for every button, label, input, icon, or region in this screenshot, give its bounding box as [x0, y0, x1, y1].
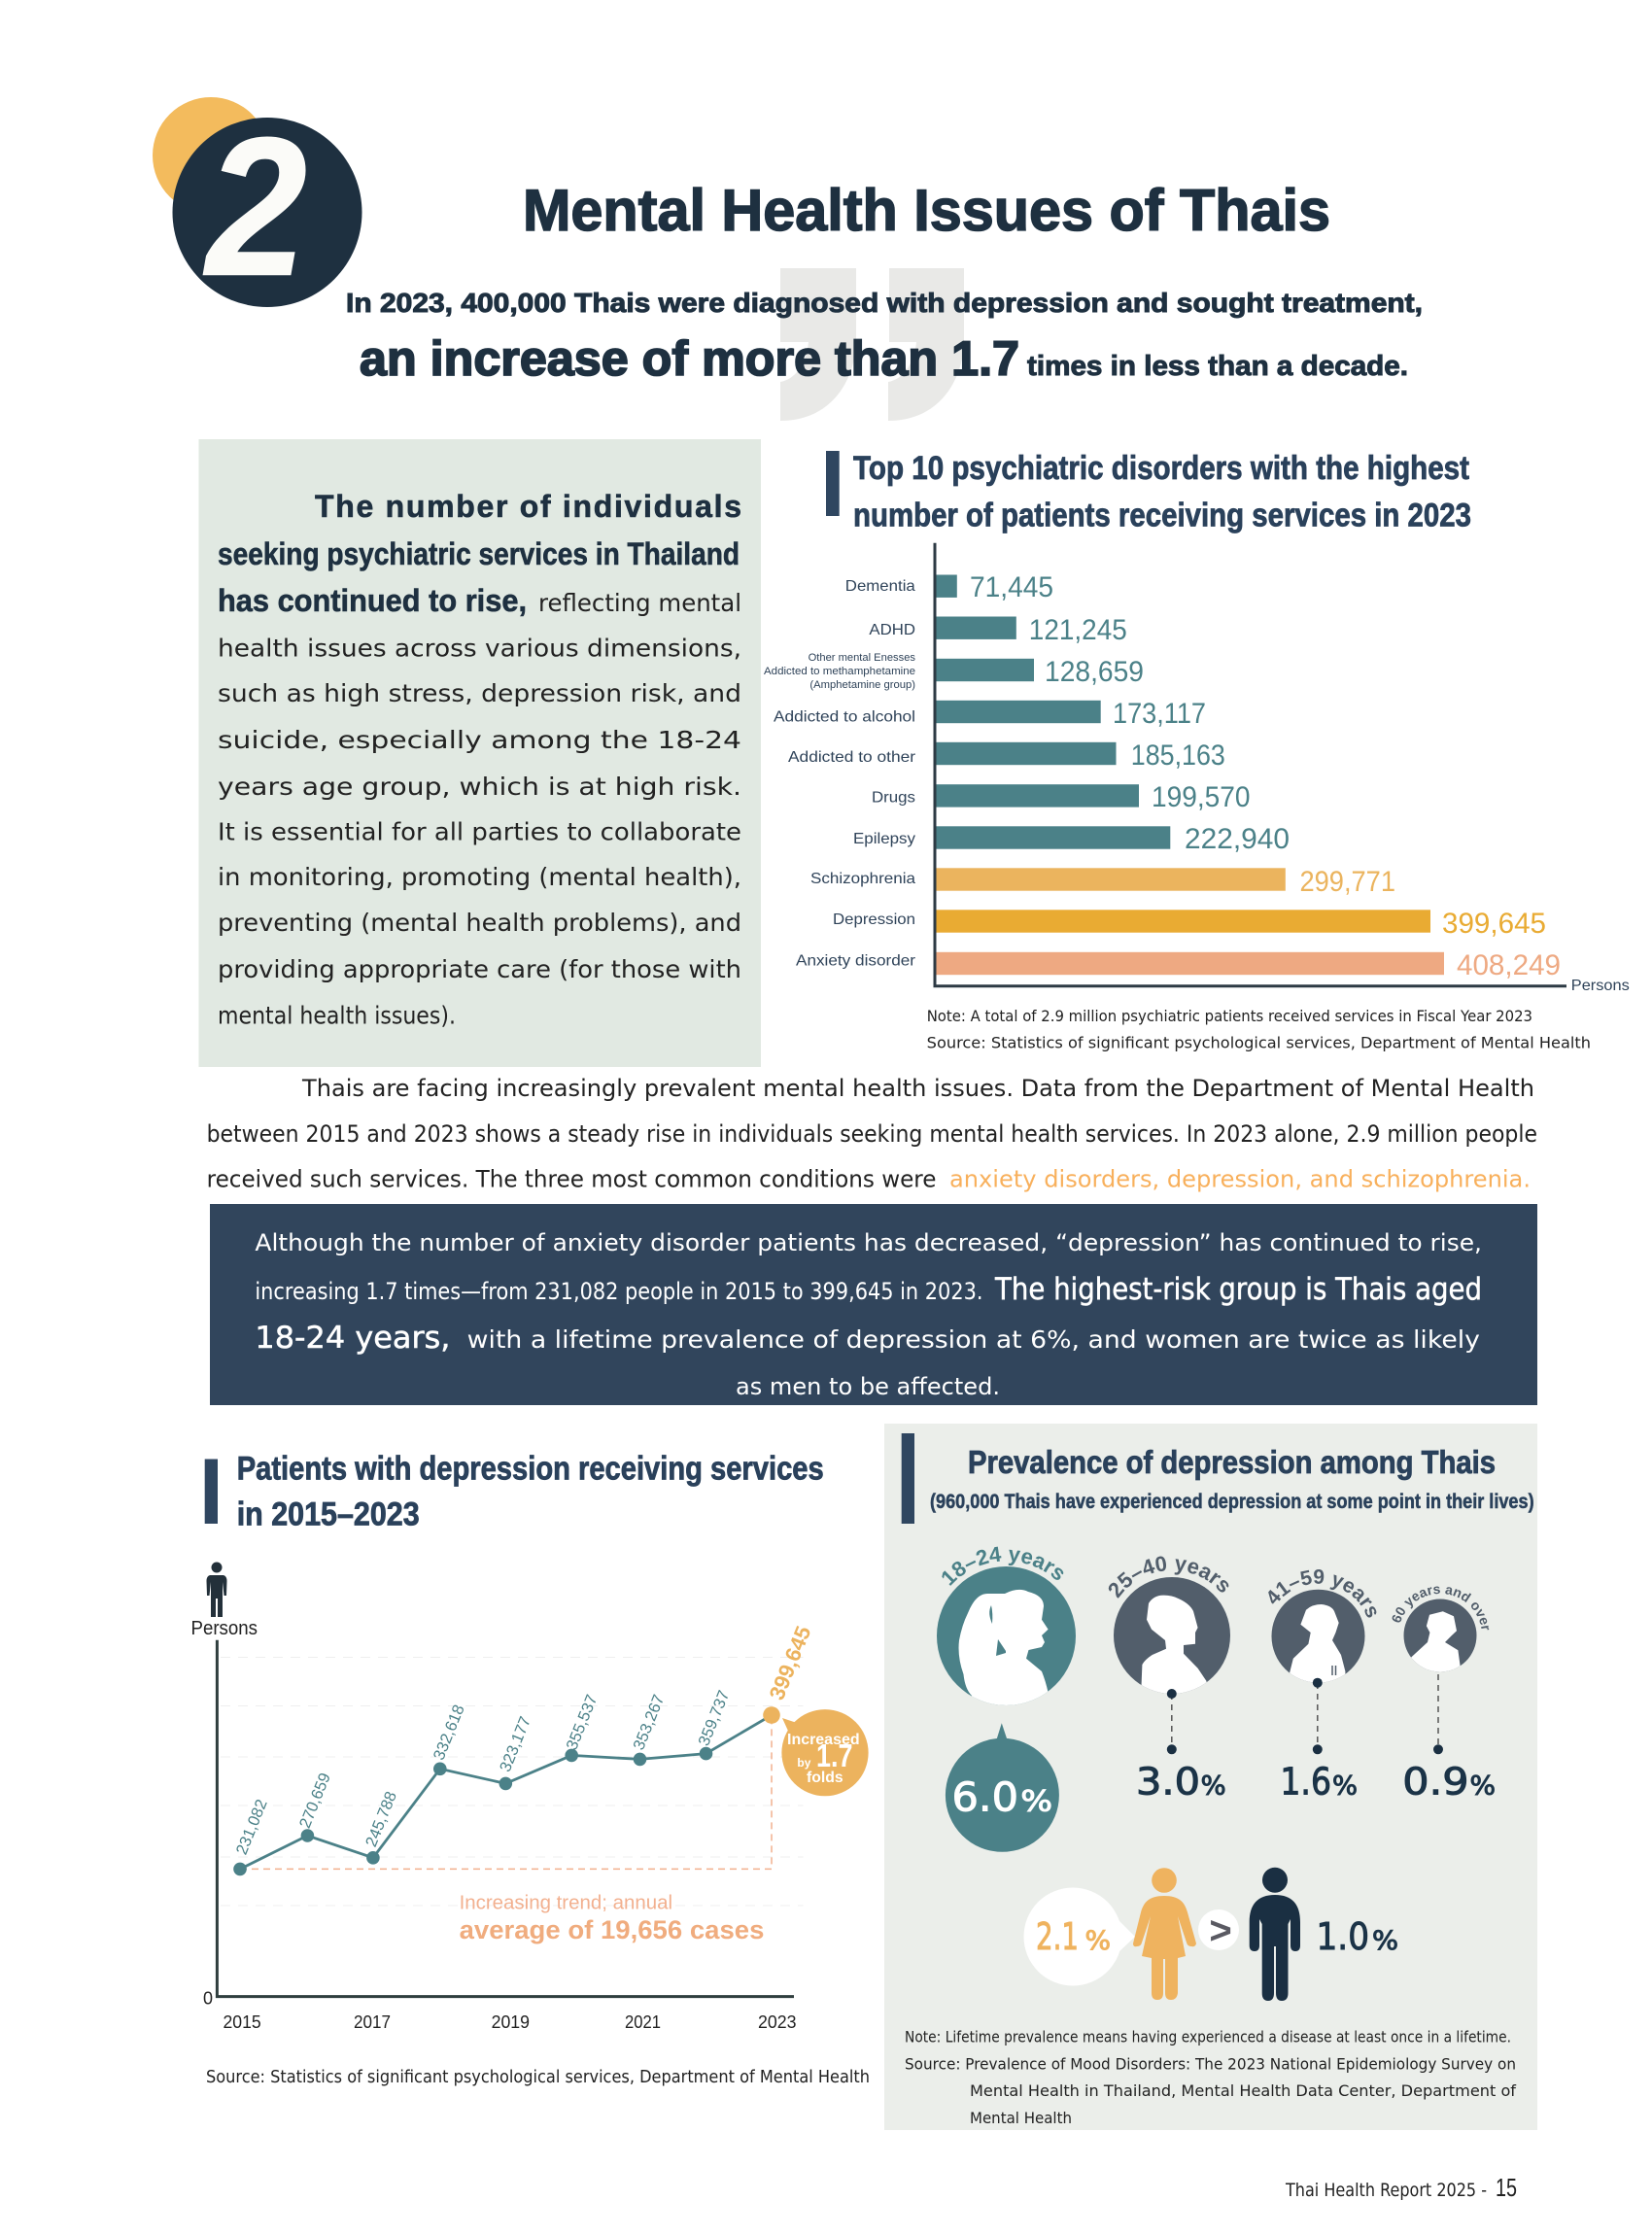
footer: page number: Thai Health Report 2025 - [1285, 2180, 1487, 2201]
bar chart: top 10 disorders: Depression [833, 911, 915, 928]
value: 3.0%: 3.0 [1136, 1761, 1200, 1804]
line chart: patients with depression: 2015 [224, 2012, 261, 2032]
footer: page number: 15 [1496, 2173, 1517, 2202]
prevalence note and source: Mental Health [970, 2109, 1072, 2127]
panel: depression callout: with a lifetime prevalence of depression at 6%, and women are twice as likely [467, 1325, 1480, 1354]
age group: 60 years and over [1392, 1586, 1489, 1671]
bar chart: top 10 disorders: 185,163 [1131, 739, 1225, 772]
line chart: patients with depression: 332,618 [430, 1702, 468, 1763]
decorative quote mark [780, 268, 964, 421]
headline statement: times in less than a decade. [1027, 351, 1408, 382]
age group: 25-40 years: 25–40 years [1108, 1557, 1228, 1599]
panel: introduction: providing appropriate care (for those with [218, 955, 741, 983]
bar chart: top 10 disorders: Dementia [845, 578, 915, 595]
line chart: patients with depression: 2019 [492, 2012, 530, 2032]
callout: increased by 1.7 folds: by [797, 1756, 811, 1770]
panel: introduction: preventing (mental health problems), and [218, 909, 741, 937]
age group: 60 years and over: 60 years and over [1392, 1586, 1489, 1631]
comparison sign: > [1209, 1909, 1232, 1952]
bar chart note and source [927, 1007, 1591, 1052]
age group: 41-59 years [1268, 1569, 1376, 1683]
bar chart: top 10 disorders: Anxiety disorder [796, 952, 916, 969]
line chart: patients with depression [190, 1563, 869, 2032]
trend annotation: Increasing trend; annual [460, 1893, 672, 1914]
prevalence note and source: Note: Lifetime prevalence means having experienced a disease at least once in a lifetime. [905, 2028, 1511, 2046]
panel: introduction: has continued to rise, [218, 583, 527, 618]
bar chart: top 10 disorders: 399,645 [1442, 908, 1546, 940]
icon: man [1250, 1868, 1300, 2001]
heading: top 10 disorders: number of patients receiving services in 2023 [853, 498, 1471, 534]
line chart: patients with depression: 2023 [758, 2012, 797, 2032]
value: 1.6%: 1.6 [1280, 1761, 1331, 1804]
value bubble: 6.0%: % [1020, 1784, 1052, 1817]
value: 3.0% [1136, 1761, 1226, 1804]
title: Mental Health Issues of Thais [523, 178, 1330, 243]
line chart: patients with depression: 323,177 [497, 1714, 534, 1774]
age group: 41-59 years: 41–59 years [1268, 1569, 1376, 1617]
section number badge: 2 [202, 97, 307, 318]
heading: top 10 disorders [826, 450, 1471, 534]
value bubble: 6.0%: 6.0 [952, 1773, 1018, 1820]
men value: 1.0%: % [1372, 1926, 1398, 1956]
value: 0.9%: 0.9 [1402, 1761, 1469, 1804]
women value bubble: 2.1% [1024, 1887, 1135, 1986]
paragraph: overview: between 2015 and 2023 shows a steady rise in individuals seeking mental health services. In 2023 alone, 2.9 million people [207, 1120, 1537, 1148]
bar chart note and source: Note: A total of 2.9 million psychiatric patients received services in Fiscal Year 2023 [927, 1007, 1532, 1025]
value: 0.9%: % [1469, 1771, 1496, 1802]
bar chart note and source: Source: Statistics of significant psychological services, Department of Mental Health [927, 1034, 1591, 1052]
panel: depression callout: Although the number of anxiety disorder patients has decreased, “depression” has continued to rise, [255, 1229, 1482, 1256]
panel: introduction: reflecting mental [538, 589, 741, 617]
heading: depression trend [205, 1450, 824, 1532]
headline statement: In 2023, 400,000 Thais were diagnosed with depression and sought treatment, [346, 288, 1423, 318]
bar chart: top 10 disorders: 299,771 [1300, 866, 1395, 898]
panel: introduction: in monitoring, promoting (mental health), [218, 863, 741, 891]
bar chart: top 10 disorders: Persons [1571, 978, 1630, 994]
comparison sign [1198, 1909, 1239, 1952]
line chart: patients with depression: 353,267 [630, 1692, 668, 1752]
bar chart: top 10 disorders: Other mental Enesses [809, 652, 915, 664]
heading: depression trend: in 2015–2023 [237, 1496, 420, 1532]
panel: introduction: health issues across various dimensions, [218, 634, 741, 663]
panel: introduction: seeking psychiatric services in Thailand [218, 536, 740, 571]
icon: woman [1133, 1868, 1196, 2000]
panel: depression callout: 18-24 years, [255, 1321, 450, 1356]
women value bubble: 2.1%: 2.1 [1036, 1915, 1079, 1958]
callout: increased by 1.7 folds [781, 1709, 869, 1796]
line chart: patients with depression: 355,537 [564, 1692, 602, 1752]
headline statement: an increase of more than 1.7 [360, 331, 1019, 386]
age group: 18-24 years [937, 1547, 1076, 1705]
callout: increased by 1.7 folds: Increased [787, 1732, 860, 1748]
heading: depression trend: Patients with depression receiving services [237, 1450, 824, 1487]
line chart: patients with depression: 2021 [625, 2012, 661, 2032]
prevalence note and source: Mental Health in Thailand, Mental Health Data Center, Department of [970, 2081, 1516, 2100]
bar chart: top 10 disorders: Drugs [872, 790, 915, 807]
connectors: age groups to values [1167, 1674, 1443, 1754]
line chart: patients with depression: Persons [190, 1618, 258, 1639]
bar chart: top 10 disorders: ADHD [869, 622, 915, 638]
bar chart: top 10 disorders: 173,117 [1113, 698, 1206, 730]
line chart: patients with depression: 270,659 [296, 1771, 334, 1831]
panel: depression callout: increasing 1.7 times—from 231,082 people in 2015 to 399,645 in 2023. [255, 1278, 982, 1305]
panel: introduction: It is essential for all parties to collaborate [218, 818, 741, 845]
trend annotation: average of 19,656 cases [460, 1915, 764, 1944]
line chart: patients with depression: 231,082 [233, 1797, 271, 1857]
heading: top 10 disorders: Top 10 psychiatric disorders with the highest [853, 450, 1469, 487]
paragraph: overview: anxiety disorders, depression, and schizophrenia. [949, 1166, 1531, 1193]
trend annotation [460, 1893, 764, 1944]
line chart: patients with depression: 245,788 [362, 1789, 400, 1849]
paragraph: overview: received such services. The three most common conditions were [207, 1166, 937, 1193]
panel: prevalence of depression [884, 1424, 1537, 2130]
panel: introduction [198, 439, 761, 1067]
headline statement [346, 288, 1423, 386]
prevalence note and source [905, 2028, 1516, 2127]
line chart: patients with depression: 0 [203, 1989, 213, 2009]
panel: introduction: suicide, especially among the 18-24 [218, 726, 741, 754]
line chart: patients with depression: 399,645 [764, 1623, 815, 1703]
icon: person [206, 1563, 227, 1617]
panel: introduction: mental health issues). [218, 1002, 456, 1030]
callout: increased by 1.7 folds: 1.7 [816, 1737, 853, 1773]
men value: 1.0%: 1.0 [1316, 1915, 1369, 1958]
bar chart: top 10 disorders: 222,940 [1185, 823, 1290, 855]
prevalence note and source: Source: Prevalence of Mood Disorders: The 2023 National Epidemiology Survey on [905, 2054, 1516, 2073]
value: 0.9% [1402, 1761, 1496, 1804]
panel: introduction: such as high stress, depression risk, and [218, 679, 741, 707]
section number badge [153, 97, 361, 318]
bar chart: top 10 disorders: Addicted to alcohol [774, 708, 915, 725]
bar chart: top 10 disorders: 408,249 [1457, 949, 1561, 981]
bar chart: top 10 disorders: 71,445 [970, 571, 1053, 603]
paragraph: overview: Thais are facing increasingly prevalent mental health issues. Data from the Department of Mental Health [301, 1075, 1534, 1102]
panel: depression callout: The highest-risk group is Thais aged [994, 1272, 1482, 1307]
value bubble: 6.0% [946, 1723, 1059, 1852]
bar chart: top 10 disorders [764, 543, 1630, 994]
age group: 18-24 years: 18–24 years [942, 1547, 1063, 1586]
bar chart: top 10 disorders: Addicted to other [788, 749, 916, 766]
bar chart: top 10 disorders: 121,245 [1029, 614, 1127, 646]
line chart: patients with depression: 2017 [354, 2012, 391, 2032]
panel: depression callout [210, 1204, 1537, 1405]
callout: increased by 1.7 folds: folds [807, 1770, 843, 1786]
line chart: patients with depression: 359,737 [695, 1688, 733, 1748]
bar chart: top 10 disorders: 199,570 [1152, 781, 1250, 813]
paragraph: overview [207, 1075, 1537, 1193]
panel: depression callout: as men to be affected. [736, 1373, 1000, 1400]
value: 3.0%: % [1201, 1771, 1226, 1802]
panel: introduction: The number of individuals [315, 489, 741, 524]
age group: 25-40 years [1108, 1557, 1230, 1694]
bar chart: top 10 disorders: (Amphetamine group) [809, 679, 915, 691]
panel: prevalence of depression: (960,000 Thais have experienced depression at some point in their lives) [930, 1491, 1534, 1513]
bar chart: top 10 disorders: Schizophrenia [810, 871, 915, 887]
panel: prevalence of depression: Prevalence of depression among Thais [968, 1444, 1496, 1480]
bar chart: top 10 disorders: 128,659 [1045, 656, 1144, 688]
bar chart: top 10 disorders: Addicted to methamphetamine [764, 666, 915, 677]
women value bubble: 2.1%: % [1084, 1926, 1111, 1956]
panel: introduction: years age group, which is at high risk. [218, 773, 741, 801]
value: 1.6%: % [1332, 1771, 1358, 1802]
bar chart: top 10 disorders: Epilepsy [853, 831, 915, 847]
line chart source: Source: Statistics of significant psychological services, Department of Mental Health [206, 2067, 870, 2087]
